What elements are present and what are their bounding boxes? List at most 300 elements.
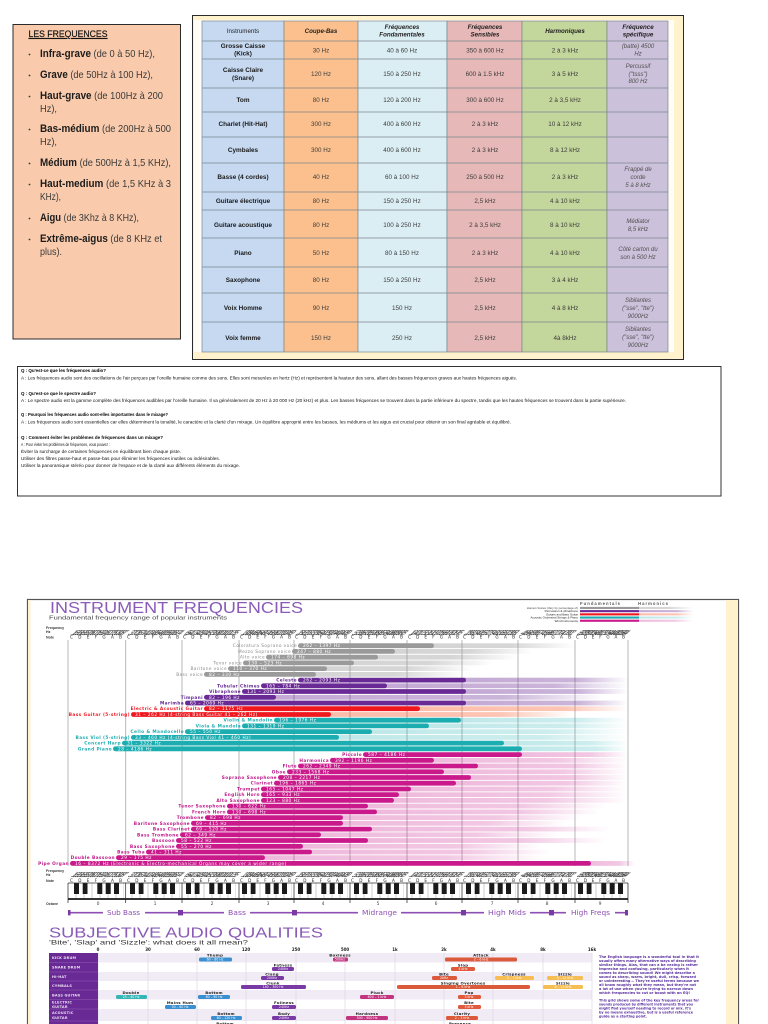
row: Guitare électrique <box>216 198 580 205</box>
bar: Tenor voice: 130 – 523 Hz <box>248 660 282 666</box>
bar: Alto voice: 174 – 698 Hz <box>271 655 305 661</box>
bar: Clarinet: 196 – 1865 Hz <box>279 781 317 787</box>
frequency and note header bottom: 130.8 146.8 164.8 174.6 196.0 220.0 246.9 <box>238 871 299 879</box>
row: Basse: corde <box>630 175 646 181</box>
octave numbers: 2 <box>211 901 214 907</box>
heading: instrument frequencies: INSTRUMENT FREQUENCIES <box>50 600 303 617</box>
row: Charlet: 400 à 600 Hz <box>383 121 421 128</box>
frequency and note header top: C D E F G A B <box>519 634 571 640</box>
frequency and note header bottom: 523.3 587.3 659.3 698.5 784.0 880.0 987.8 <box>349 871 411 879</box>
octave numbers: 0 <box>97 901 100 907</box>
tags: bass guitar: 60 – 90 Hz <box>206 995 223 999</box>
bar: Concert Harp <box>84 741 628 747</box>
text: question 4: A : Pour éviter les problèmes de fréquences, vous pouvez : <box>21 442 110 447</box>
text: question 4: Utiliser des filtres passe-haut et passe-bas pour éliminer les fréquences inutiles ou indésirables. <box>21 456 220 461</box>
text: question 4: Q : Comment éviter les problèmes de fréquences dans un mixage? <box>21 435 163 440</box>
text: explanation: which frequencies to cut or boost with an EQ! <box>599 991 690 995</box>
bar: Violin & Mandolin <box>224 718 628 724</box>
tags: kick drum: 60 – 80 Hz <box>207 958 224 962</box>
table header: Fréquences <box>468 24 503 31</box>
row: Piano: Piano <box>234 250 252 257</box>
bar: Concert Harp: Concert Harp <box>84 741 121 747</box>
text: explanation: might find yourself needing to record or mix. It's <box>599 1006 691 1010</box>
bar: Coloratura Soprano voice: 262 – 1397 Hz <box>303 643 341 649</box>
row: Grosse Caisse: (Kick) <box>234 50 252 58</box>
row: Piano: 80 à 150 Hz <box>385 250 419 257</box>
frequency and note header top: 130.8 146.8 164.8 174.6 196.0 220.0 246.9 <box>238 629 299 637</box>
bar: Bass Saxophone: Bass Saxophone <box>130 844 175 850</box>
row: Voix femme: 250 Hz <box>392 335 412 342</box>
bar: Tubular Chimes: 165 – 784 Hz <box>266 683 300 689</box>
text: question 1: A : Les fréquences audio sont des oscillations de l'air perçues par l'oreille humaine comme des sons. Elles sont mesurées en hertz (Hz) et représentent la hauteur des sons, allant des basses fréquences graves aux hautes fréquences aiguës. <box>21 376 517 380</box>
tags: piano <box>216 1021 471 1024</box>
text: explanation: imprecise and confusing, particularly when it <box>599 967 689 971</box>
list: bandes de fréquences <box>29 48 171 258</box>
frequency and note header bottom: 32.70 36.71 41.20 43.65 49.00 55.00 61.74 <box>125 871 187 879</box>
bar: Grand Piano <box>78 746 628 752</box>
row: Cymbales: Cymbales <box>228 147 259 154</box>
octave numbers <box>46 901 602 907</box>
tags: acoustic guitar <box>211 1011 478 1020</box>
bar: French Horn: French Horn <box>192 809 226 815</box>
frequency and note header bottom: Hz <box>46 873 51 877</box>
axis labels <box>97 947 596 952</box>
row: Caisse Claire: Caisse Claire <box>223 67 264 74</box>
axis labels: 250 <box>292 947 300 952</box>
bar: Electric & Acoustic Guitar <box>131 706 628 712</box>
bar: Bassoon <box>152 838 606 844</box>
tags: acoustic guitar: 240Hz <box>279 1016 289 1020</box>
tags: hi-hat: Sizzle <box>558 972 572 976</box>
frequency ranges scale <box>68 909 628 917</box>
list: bandes de fréquences: Grave (de 50Hz à 100 Hz), <box>40 69 153 81</box>
axis labels: 30 <box>145 947 151 952</box>
bar: Harmonica <box>299 758 628 764</box>
row: Tom: Tom <box>236 97 250 104</box>
axis labels: 60 <box>194 947 200 952</box>
bar: Concert Harp: 31 – 3322 Hz <box>127 741 161 747</box>
frequency and note header top: 523.3 587.3 659.3 698.5 784.0 880.0 987.8 <box>349 629 411 637</box>
row: Guitare électrique: 80 Hz <box>313 198 329 205</box>
piano keyboard <box>68 883 628 903</box>
tags: electric guitar: Fullness <box>274 1000 294 1005</box>
row labels: GUITAR <box>52 1005 68 1009</box>
row: Caisse Claire: ("tsss") <box>629 72 647 78</box>
octave numbers: 8 <box>546 901 549 907</box>
frequency and note header top: C D E F G A B <box>463 634 515 640</box>
bar: Viola & Mandola <box>196 723 628 729</box>
bar: Mezzo Soprano voice: Mezzo Soprano voice <box>238 649 291 655</box>
bar: Vibraphone: Vibraphone <box>209 689 241 695</box>
tags: bass guitar <box>116 990 481 999</box>
bar: Celeste <box>276 678 628 684</box>
row: Voix femme <box>225 327 654 349</box>
row: Voix femme: Voix femme <box>225 335 261 342</box>
text: question 4: Éviter la surcharge de certaines fréquences en équilibrant bien chaque piste. <box>21 448 181 454</box>
bar: Bass Clarinet: Bass Clarinet <box>153 827 190 833</box>
table header: spécifique <box>623 32 654 38</box>
chart: subjective audio qualities grid <box>49 947 596 1024</box>
list: bandes de fréquences: Infra-grave (de 0 à 50 Hz), <box>40 48 155 60</box>
row labels: GUITAR <box>52 1016 68 1020</box>
list: bandes de fréquences: Haut-grave (de 100Hz à 200 <box>40 90 163 102</box>
bar: Soprano Saxophone <box>222 775 628 781</box>
row: Caisse Claire: 600 à 1.5 kHz <box>466 71 504 78</box>
bar: Bass Trombone: 62 – 349 Hz <box>185 832 216 838</box>
row: Basse: 2 à 3 kHz <box>552 174 578 181</box>
bar: Cello & Mandocello: Cello & Mandocello <box>130 729 184 735</box>
tags: electric guitar <box>165 1000 481 1009</box>
bar: Vibraphone: 131 – 2093 Hz <box>247 689 285 695</box>
octave numbers: 5 <box>377 901 380 907</box>
row: Charlet: 10 à 12 kHz <box>548 121 582 128</box>
bar: Bass Guitar: 31 – 262 Hz (4-string Bass Guitar 41 – 262 Hz) <box>135 712 258 718</box>
bar: Oboe: Oboe <box>272 769 286 775</box>
tags: hi-hat <box>261 972 583 980</box>
frequency and note header bottom: C D E F G A B <box>463 878 515 883</box>
bar: Clarinet: Clarinet <box>251 781 273 787</box>
frequency and note header bottom: 4186 4699 5274 5588 6272 7040 7902 <box>517 871 579 879</box>
row: Caisse Claire <box>223 64 652 85</box>
bar: Bass Tuba: 41 – 311 Hz <box>151 850 182 856</box>
row: Piano: Côté carton du <box>618 247 658 253</box>
heading: les fréquences: LES FREQUENCES <box>28 29 108 40</box>
table header: Coupe-Bas <box>305 28 338 35</box>
frequency and note header top: C D E F G A B <box>351 634 403 640</box>
row: Basse: 40 Hz <box>313 174 329 181</box>
frequency and note header top: Hz <box>46 630 51 634</box>
bar: Trumpet: Trumpet <box>237 786 260 792</box>
bar: Flute: 262 – 2349 Hz <box>303 764 341 770</box>
row: Caisse Claire: Percussif <box>626 64 652 70</box>
legend: Harmonics <box>638 601 669 606</box>
bar: Harmonica: 392 – 1196 Hz <box>335 758 373 764</box>
tags: electric guitar: 50 – 60 Hz <box>172 1005 189 1009</box>
row: Saxophone: 2,5 kHz <box>474 277 496 284</box>
tags: snare drum <box>272 962 475 971</box>
tags: cymbals: Clunk <box>266 980 280 986</box>
tags: electric guitar: Bite <box>464 1000 474 1005</box>
frequency and note header bottom: 261.6 293.7 329.6 349.2 392.0 440.0 493.9 <box>293 871 355 879</box>
tags: kick drum <box>199 952 517 962</box>
row: Caisse Claire: 150 à 250 Hz <box>383 71 421 78</box>
table header <box>227 24 654 38</box>
frequency and note header top <box>46 626 633 640</box>
bar: Harmonica: Harmonica <box>299 758 329 764</box>
row: Basse: 250 à 500 Hz <box>466 174 504 181</box>
tags: hi-hat: 5 – 7 kHz <box>507 976 522 980</box>
bar: Marimba: 65 – 2069 Hz <box>190 700 224 706</box>
frequency and note header bottom: Frequency <box>46 869 64 873</box>
text: explanation: This grid shows some of the key frequency areas for <box>599 998 699 1002</box>
row: Voix Homme <box>224 298 654 320</box>
table header: Fréquences <box>385 24 420 31</box>
row: Voix femme: Sibilantes <box>625 327 651 333</box>
tags: acoustic guitar: 500 – 900 Hz <box>357 1016 378 1020</box>
text: explanation: similar things. Alas, that can a be vexing is rather <box>599 963 698 967</box>
bar: French Horn <box>192 809 600 815</box>
list: bandes de fréquences: Aigu (de 3Khz à 8 KHz), <box>40 212 139 224</box>
frequency and note header top: 16.35 18.35 20.60 21.83 24.50 27.50 30.87 <box>68 629 131 637</box>
bar: Violin & Mandolin: 196 – 1976 Hz <box>279 718 317 724</box>
frequency and note header top: 1047 1175 1319 1397 1568 1760 1976 <box>406 629 467 637</box>
frequency and note header top: C D E F G A B <box>240 634 291 640</box>
frequency ranges scale: Sub Bass <box>107 909 141 917</box>
list: bandes de fréquences: Hz), <box>40 104 57 115</box>
row: Saxophone: 80 Hz <box>313 277 329 284</box>
table header: Fréquence <box>622 24 654 31</box>
text: explanation: all know roughly what they mean, but they're not <box>599 983 696 987</box>
frequency and note header bottom: C D E F G A B <box>183 878 235 883</box>
bar: Celeste: 262 – 2093 Hz <box>303 678 341 684</box>
text: explanation <box>599 955 700 1018</box>
row: Guitare électrique: 150 à 250 Hz <box>383 198 421 205</box>
heading: subjective audio qualities: SUBJECTIVE AUDIO QUALITIES <box>49 926 323 942</box>
frequency and note header bottom: C D E F G A B <box>576 878 625 883</box>
row: Grosse Caisse: Grosse Caisse <box>221 43 266 50</box>
tags: hi-hat: 9 – 12 kHz <box>557 976 574 980</box>
row: Grosse Caisse: (batte) 4500 <box>622 44 655 50</box>
frequency and note header bottom: C D E F G A B <box>519 878 571 883</box>
frequency and note header bottom <box>46 869 633 883</box>
bar: Violin & Mandolin: Violin & Mandolin <box>224 718 273 724</box>
row: Tom: 300 à 600 Hz <box>466 97 504 104</box>
tags: cymbals: 8 – 11 kHz <box>555 985 572 989</box>
octave numbers: 6 <box>435 901 438 907</box>
row: Voix Homme: ("sse", "tte") <box>622 306 654 312</box>
row: Grosse Caisse: 350 à 600 Hz <box>466 48 504 54</box>
tags: kick drum: Thump <box>207 952 223 958</box>
bar: Bass voice: 82 – 330 Hz <box>209 672 240 678</box>
table header: Instruments <box>227 28 259 35</box>
row: Voix Homme: 150 Hz <box>392 305 412 312</box>
bar: Double Bassoon <box>71 855 543 861</box>
axis labels: 500 <box>341 947 349 952</box>
text: explanation: a lot of use when you're trying to narrow down <box>599 987 693 991</box>
tags: acoustic guitar: Body <box>278 1011 290 1016</box>
row: Piano <box>234 247 658 261</box>
bar: Celeste: Celeste <box>276 678 297 684</box>
text: explanation: sounds produced by different instruments that you <box>599 1002 693 1006</box>
bar: Tenor voice <box>212 660 493 666</box>
list: bandes de fréquences: KHz), <box>40 192 61 203</box>
bar: Alto voice: Alto voice <box>240 655 265 661</box>
row: Caisse Claire: (Snare) <box>232 75 254 82</box>
row: Grosse Caisse: Hz <box>634 52 642 58</box>
tags: hi-hat: 2kHz <box>440 976 448 980</box>
row: Basse: Basse (4 cordes) <box>217 174 269 181</box>
bar: Double Bassoon: 29 – 175 Hz <box>121 855 152 861</box>
frequency and note header top: 32.70 36.71 41.20 43.65 49.00 55.00 61.74 <box>125 629 187 637</box>
row labels: ELECTRIC <box>52 1000 72 1004</box>
bar: Marimba <box>160 700 628 706</box>
bar: Piccolo: 587 – 4186 Hz <box>368 752 406 758</box>
row: Basse: 5 à 8 kHz <box>625 183 651 189</box>
tags: hi-hat: Crispness <box>502 972 526 976</box>
row: Tom: 120 à 200 Hz <box>383 97 421 104</box>
bar: Baritone Saxophone: 69 – 415 Hz <box>196 821 227 827</box>
tags: cymbals: 140 – 300 Hz <box>263 985 284 989</box>
row: Voix Homme: 2,5 kHz <box>474 305 496 312</box>
frequency ranges scale: High Freqs <box>571 909 611 917</box>
row: Guitare acoustique: Guitare acoustique <box>214 222 272 229</box>
chart: instrument frequency bars <box>38 640 635 867</box>
bar: Alto Saxophone <box>216 798 628 804</box>
table header: Harmoniques <box>545 28 585 35</box>
row: Grosse Caisse: 30 Hz <box>313 48 329 54</box>
frequency and note header bottom: C D E F G A B <box>70 878 122 883</box>
panel: tableau des fréquences par instrument <box>192 16 684 360</box>
row: Saxophone: 150 à 250 Hz <box>383 277 421 284</box>
tags: acoustic guitar: Hardness <box>356 1011 379 1016</box>
frequency ranges scale: Bass <box>228 909 247 917</box>
bar: Bass Clarinet: 69 – 520 Hz <box>196 827 227 833</box>
row: Basse: Frappé de <box>624 167 652 173</box>
axis labels: 0 <box>97 947 100 952</box>
tags: cymbals <box>241 980 583 989</box>
bar: Trumpet: 165 – 1047 Hz <box>266 786 304 792</box>
bar: Tubular Chimes <box>217 683 628 689</box>
frequency and note header top: 65.41 73.42 82.41 87.31 98.00 110.0 123.5 <box>181 629 243 637</box>
bar: Tubular Chimes: Tubular Chimes <box>217 683 260 689</box>
row: Tom <box>236 97 581 104</box>
frequency and note header bottom: C D E F G A B <box>351 878 403 883</box>
frequency and note header bottom: C D E F G A B <box>127 878 179 883</box>
panel: questions et réponses <box>18 366 721 496</box>
tags: kick drum: 500Hz <box>335 958 345 962</box>
frequency and note header top: C D E F G A B <box>576 634 625 640</box>
table header: Sensibles <box>471 32 500 38</box>
table header: Fondamentales <box>379 32 425 38</box>
bar: Bassoon: 58 – 522 Hz <box>181 838 212 844</box>
row: Cymbales: 2 à 3 kHz <box>472 147 498 154</box>
bar: Cello & Mandocello <box>130 729 628 735</box>
axis labels: 120 <box>242 947 250 952</box>
row: Caisse Claire: 120 Hz <box>311 71 331 78</box>
text: explanation: by no means exhaustive, but is a useful reference <box>599 1010 694 1014</box>
frequency and note header top: C D E F G A B <box>408 634 459 640</box>
tags: electric guitar: 240Hz <box>279 1005 289 1009</box>
row: Cymbales: 400 à 600 Hz <box>383 147 421 154</box>
panel: les fréquences <box>13 24 180 339</box>
row labels: HI-HAT <box>52 975 67 979</box>
tags: kick drum: 2 – 6 kHz <box>474 958 489 962</box>
bar: English Horn <box>224 792 628 798</box>
frequency and note header bottom: 8372 9397 10548 11175 12544 14080 15804 <box>574 871 633 879</box>
tags: acoustic guitar: Bottom <box>217 1011 235 1016</box>
tags: kick drum: Attack <box>473 952 489 958</box>
bar: Trombone: 82 – 698 Hz <box>210 815 241 821</box>
row: Caisse Claire: 800 Hz <box>628 79 648 85</box>
tags: bass guitar: Pop <box>464 990 474 995</box>
octave numbers: 7 <box>491 901 494 907</box>
bar: Alto Saxophone: Alto Saxophone <box>216 798 260 804</box>
tags: snare drum: 240Hz <box>278 967 288 971</box>
bar: Tenor Saxophone <box>178 804 606 810</box>
tags: hi-hat: Bite <box>439 972 449 976</box>
bar: Alto Saxophone: 123 – 880 Hz <box>266 798 300 804</box>
bar: Soprano Saxophone: Soprano Saxophone <box>222 775 277 781</box>
row: Voix femme: ("sse", "tte") <box>622 335 654 341</box>
bar: Electric & Acoustic Guitar: Electric & Acoustic Guitar <box>131 706 203 712</box>
frequency and note header top: 8372 9397 10548 11175 12544 14080 15804 <box>574 629 633 637</box>
bar: French Horn: 130 – 698 Hz <box>232 809 266 815</box>
bar: Trumpet <box>237 786 628 792</box>
row: Voix femme: 2,5 kHz <box>474 335 496 342</box>
subtitle: bite slap sizzle: 'Bite', 'Slap' and 'Sizzle': what does it all mean? <box>49 940 249 946</box>
row: Grosse Caisse: 2 à 3 kHz <box>552 48 578 54</box>
row: Grosse Caisse: 40 à 60 Hz <box>387 48 417 54</box>
text: question 3 <box>21 412 511 424</box>
frequency and note header bottom: 2093 2349 2637 2794 3136 3520 3951 <box>461 871 523 879</box>
tags: acoustic guitar: Clarity <box>454 1011 470 1016</box>
row: Cymbales: 300 Hz <box>311 147 331 154</box>
row labels: ACOUSTIC <box>52 1011 74 1015</box>
row: Piano: 50 Hz <box>313 250 329 257</box>
bar: Clarinet <box>251 781 628 787</box>
octave numbers: Octave <box>46 902 58 906</box>
row: Tom: 2 à 3,5 kHz <box>549 97 581 104</box>
frequency ranges scale: Midrange <box>362 909 397 917</box>
frequency and note header top: C D E F G A B <box>295 634 347 640</box>
bar: Cello & Mandocello: 55 – 550 Hz <box>190 729 221 735</box>
legend: Fundamentals <box>580 601 621 606</box>
octave numbers: 1 <box>154 901 157 907</box>
tags: hi-hat: Clang <box>265 972 279 976</box>
tags: acoustic guitar: 80 – 120 Hz <box>217 1016 236 1020</box>
row: Charlet <box>218 121 582 128</box>
legend: Human Voices (Vary by percentage of) <box>527 606 578 610</box>
frequency and note header top: Frequency <box>46 626 64 630</box>
row: Grosse Caisse <box>221 43 655 58</box>
bar: Baritone Saxophone <box>134 821 566 827</box>
frequency and note header top: 4186 4699 5274 5588 6272 7040 7902 <box>517 629 579 637</box>
bar: Viola & Mandola: Viola & Mandola <box>196 723 241 729</box>
row: Guitare acoustique: 80 Hz <box>313 222 329 229</box>
tags: acoustic guitar: 2 – 3 kHz <box>455 1016 470 1020</box>
text: question 1 <box>21 368 517 380</box>
text: question 2: A : Le spectre audio est la gamme complète des fréquences audibles par l'oreille humaine. Il va généralement de 20 Hz à 20 000 Hz (20 kHz) et plus. Les basses fréquences se trouvent dans la partie inférieure du spectre, tandis que les hautes fréquences se trouvent dans la partie supérieure. <box>21 398 626 403</box>
row: Guitare acoustique: 8,5 kHz <box>628 227 648 233</box>
frequency and note header bottom: 65.41 73.42 82.41 87.31 98.00 110.0 123.5 <box>181 871 243 879</box>
row: Guitare acoustique: 100 à 250 Hz <box>383 222 421 229</box>
legend <box>527 601 693 623</box>
row labels <box>49 953 98 1024</box>
row: Caisse Claire: 3 à 5 kHz <box>552 71 578 78</box>
row: Voix femme: 9000Hz <box>628 343 648 349</box>
frequency and note header bottom: C D E F G A B <box>295 878 347 883</box>
bar: Electric & Acoustic Guitar: 82 – 1175 Hz <box>209 706 243 712</box>
frequency and note header bottom: Note <box>46 879 54 883</box>
list: bandes de fréquences: plus). <box>40 247 62 258</box>
row: Cymbales: 8 à 12 kHz <box>550 147 580 154</box>
tags: cymbals: Singing Overtones <box>441 980 486 986</box>
row: Saxophone: 3 à 4 kHz <box>552 277 578 284</box>
tags: hi-hat: 200Hz <box>267 976 277 980</box>
bar: Mezzo Soprano voice: 247 – 880 Hz <box>297 649 331 655</box>
octave numbers: 9 <box>599 901 602 907</box>
legend: Wind Instruments <box>555 619 578 623</box>
bar: Tenor Saxophone: 130 – 622 Hz <box>232 804 266 810</box>
text: question 4: Utiliser la panoramique stéréo pour donner de l'espace et de la clarté aux différents éléments du mixage. <box>21 463 240 468</box>
bar: Bass Saxophone <box>130 844 541 850</box>
row: Basse <box>217 167 652 189</box>
bar: Timpani: 82 – 196 Hz <box>209 695 240 701</box>
bar: Baritone Saxophone: Baritone Saxophone <box>134 821 190 827</box>
row: Guitare acoustique: 2 à 3,5 kHz <box>469 222 501 229</box>
bar: Grand Piano: 28 – 4186 Hz <box>118 746 152 752</box>
text: explanation: guide as a starting point. <box>599 1014 647 1018</box>
